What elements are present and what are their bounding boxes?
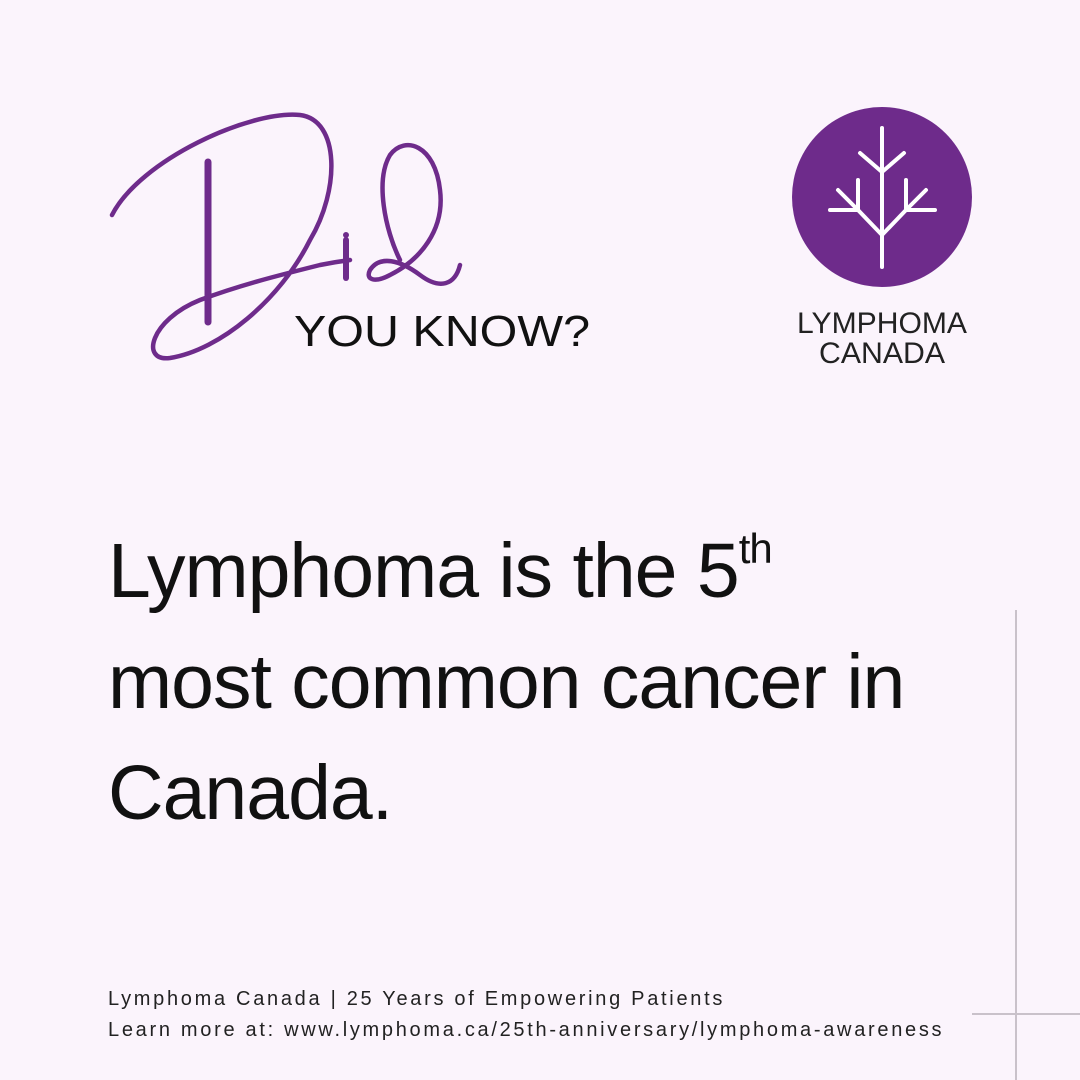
icon: purple circle with tree — [792, 107, 972, 287]
script l/d loop — [369, 145, 460, 284]
main statement text: Canada. — [108, 750, 392, 836]
footer text: Lymphoma Canada | 25 Years of Empowering Patients — [108, 988, 725, 1010]
footer text — [108, 988, 944, 1041]
title: Did you know — [110, 112, 590, 360]
footer text: Learn more at: www.lymphoma.ca/25th-anniversary/lymphoma-awareness — [108, 1019, 944, 1041]
script D loop — [112, 115, 350, 358]
main statement text: most common cancer in — [108, 639, 904, 725]
main statement text — [108, 525, 904, 836]
script i — [343, 240, 349, 278]
logo text: LYMPHOMA — [797, 307, 967, 340]
script D stem — [204, 162, 212, 322]
logo: Lymphoma Canada — [792, 107, 972, 370]
main statement text: Lymphoma is the 5th — [108, 525, 772, 614]
logo: Lymphoma Canada: CANADA — [819, 337, 945, 370]
heading text: YOU KNOW?: YOU KNOW? — [294, 307, 590, 356]
